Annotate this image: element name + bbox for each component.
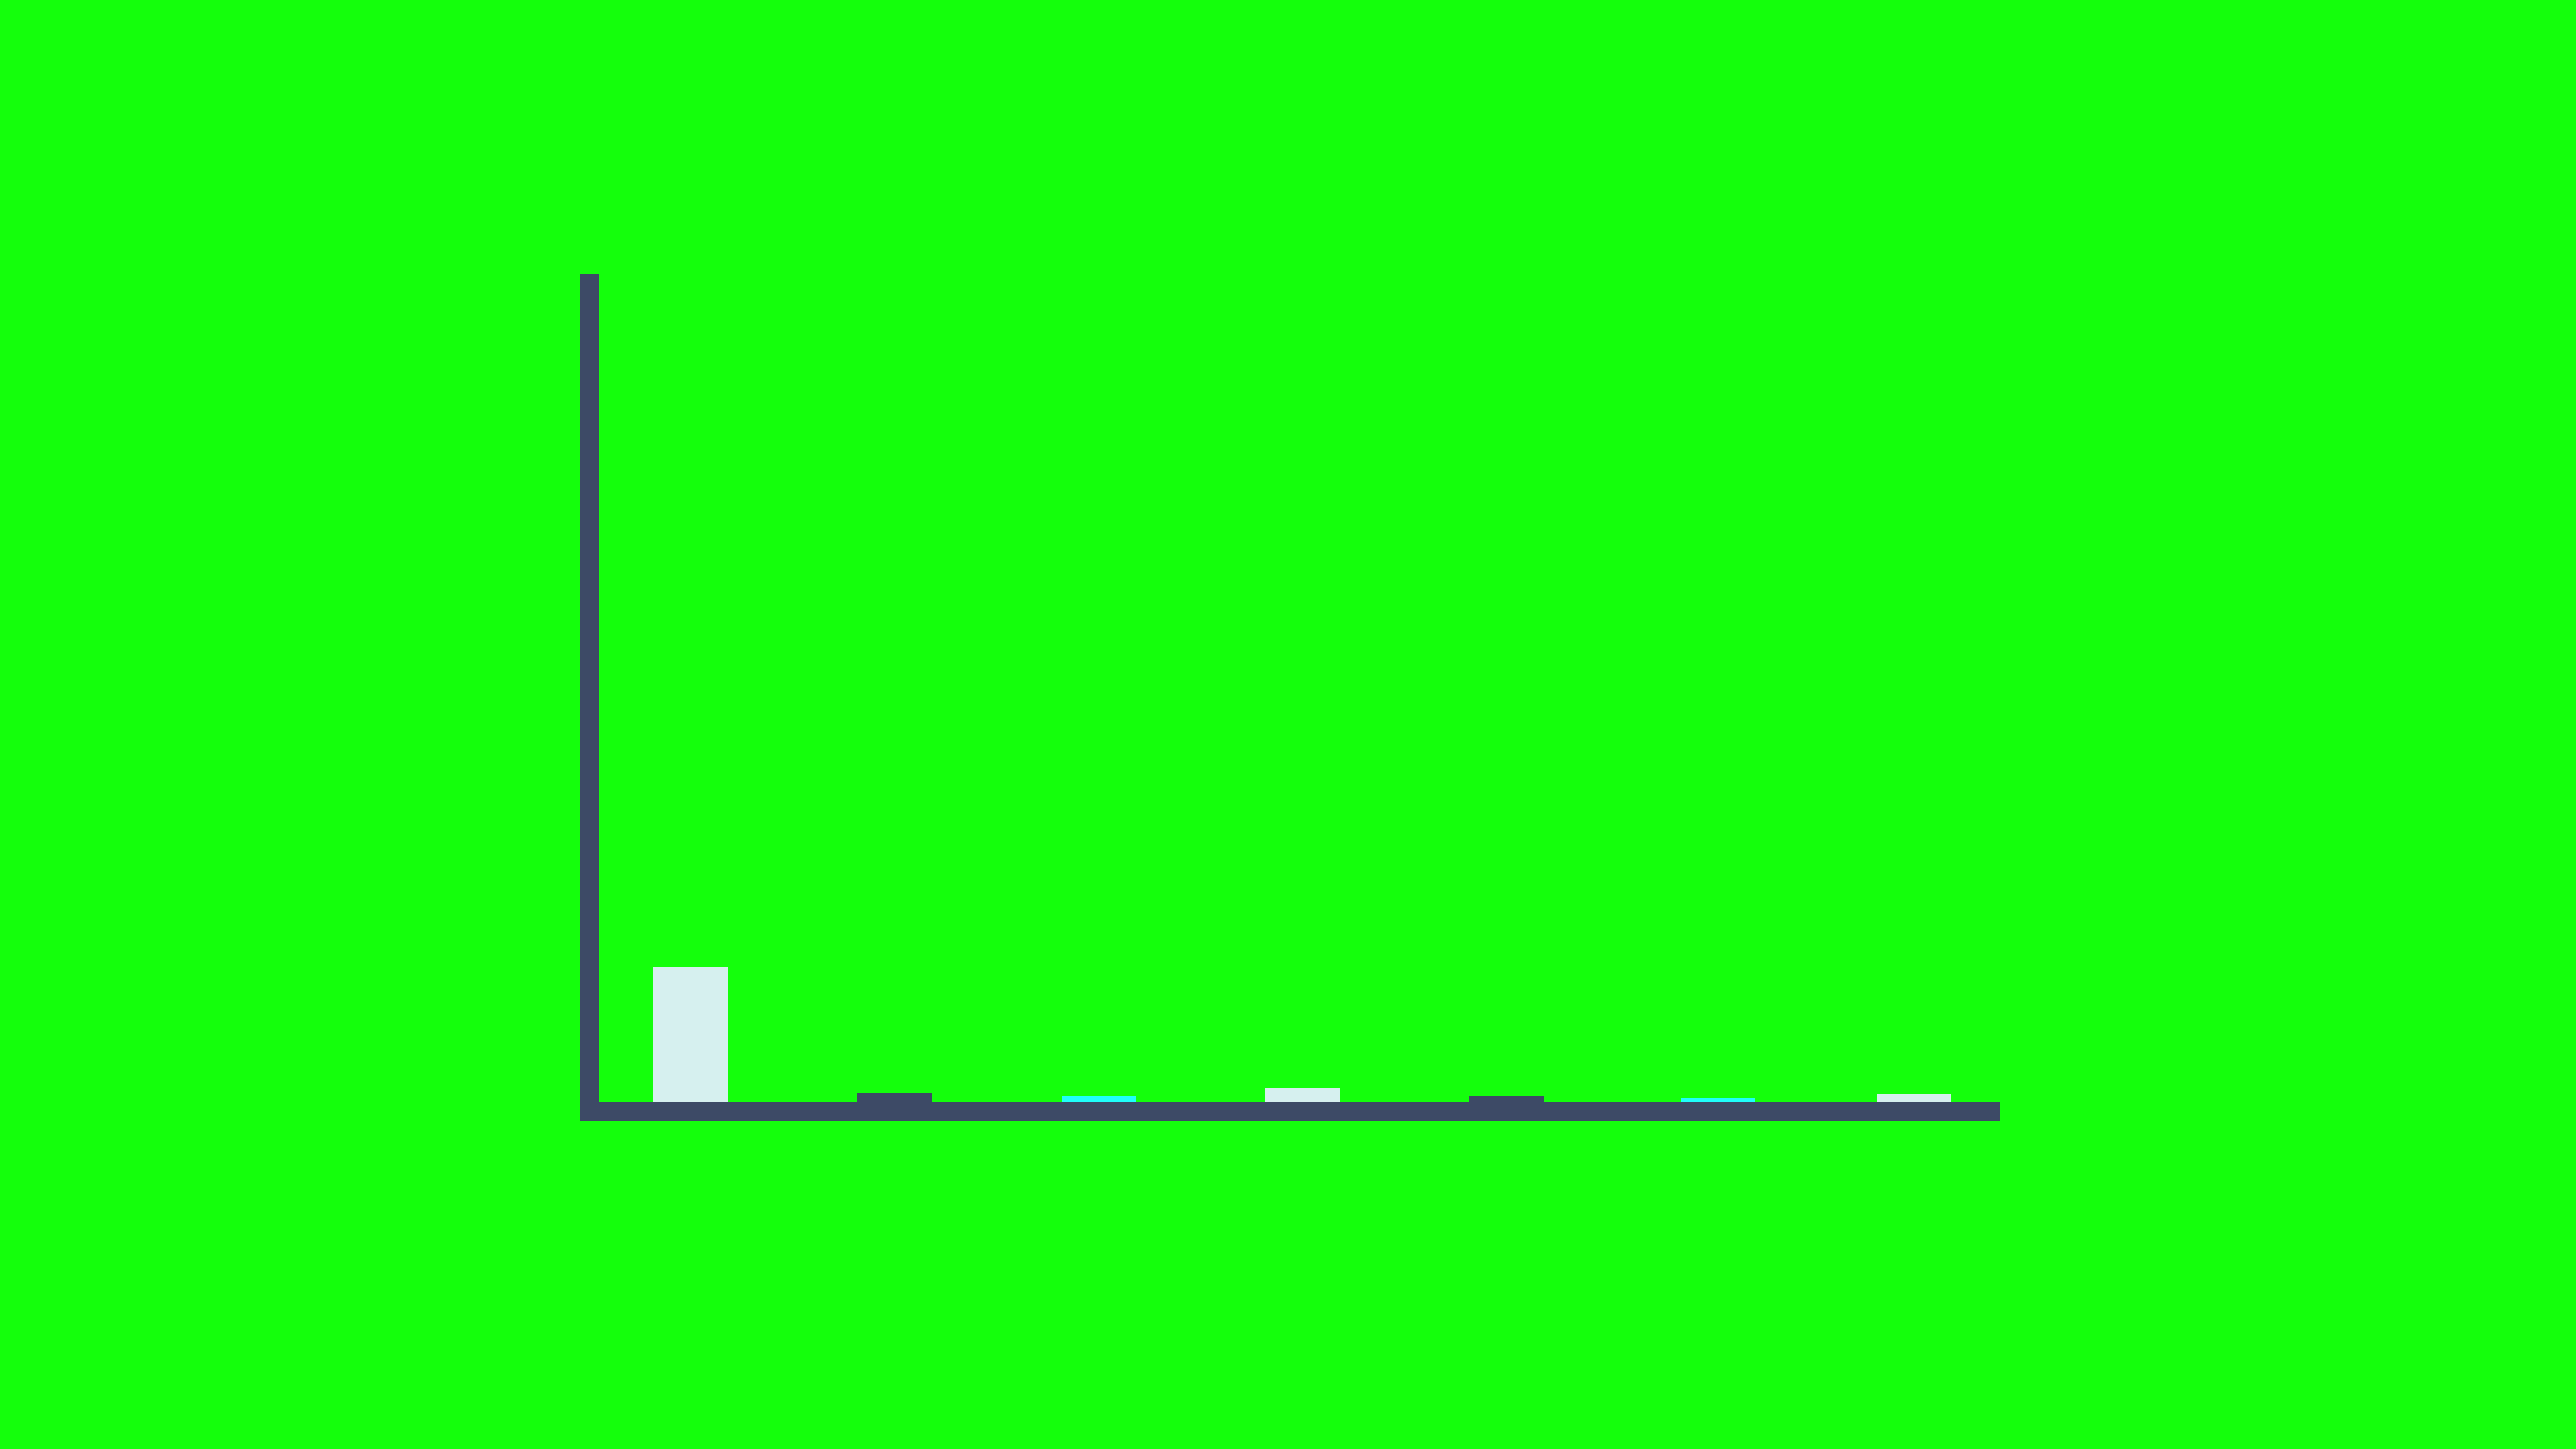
bar 1: pale blue, tall [653, 967, 728, 1102]
x axis [580, 1102, 2000, 1121]
y axis [580, 274, 599, 1121]
bar 2: dark slate [857, 1093, 932, 1102]
bar 4: pale blue [1265, 1088, 1340, 1102]
bar 3: cyan [1062, 1096, 1136, 1102]
bar 7: pale blue [1877, 1094, 1951, 1102]
bar 5: dark slate [1469, 1096, 1544, 1102]
bar 6: cyan [1681, 1098, 1755, 1102]
